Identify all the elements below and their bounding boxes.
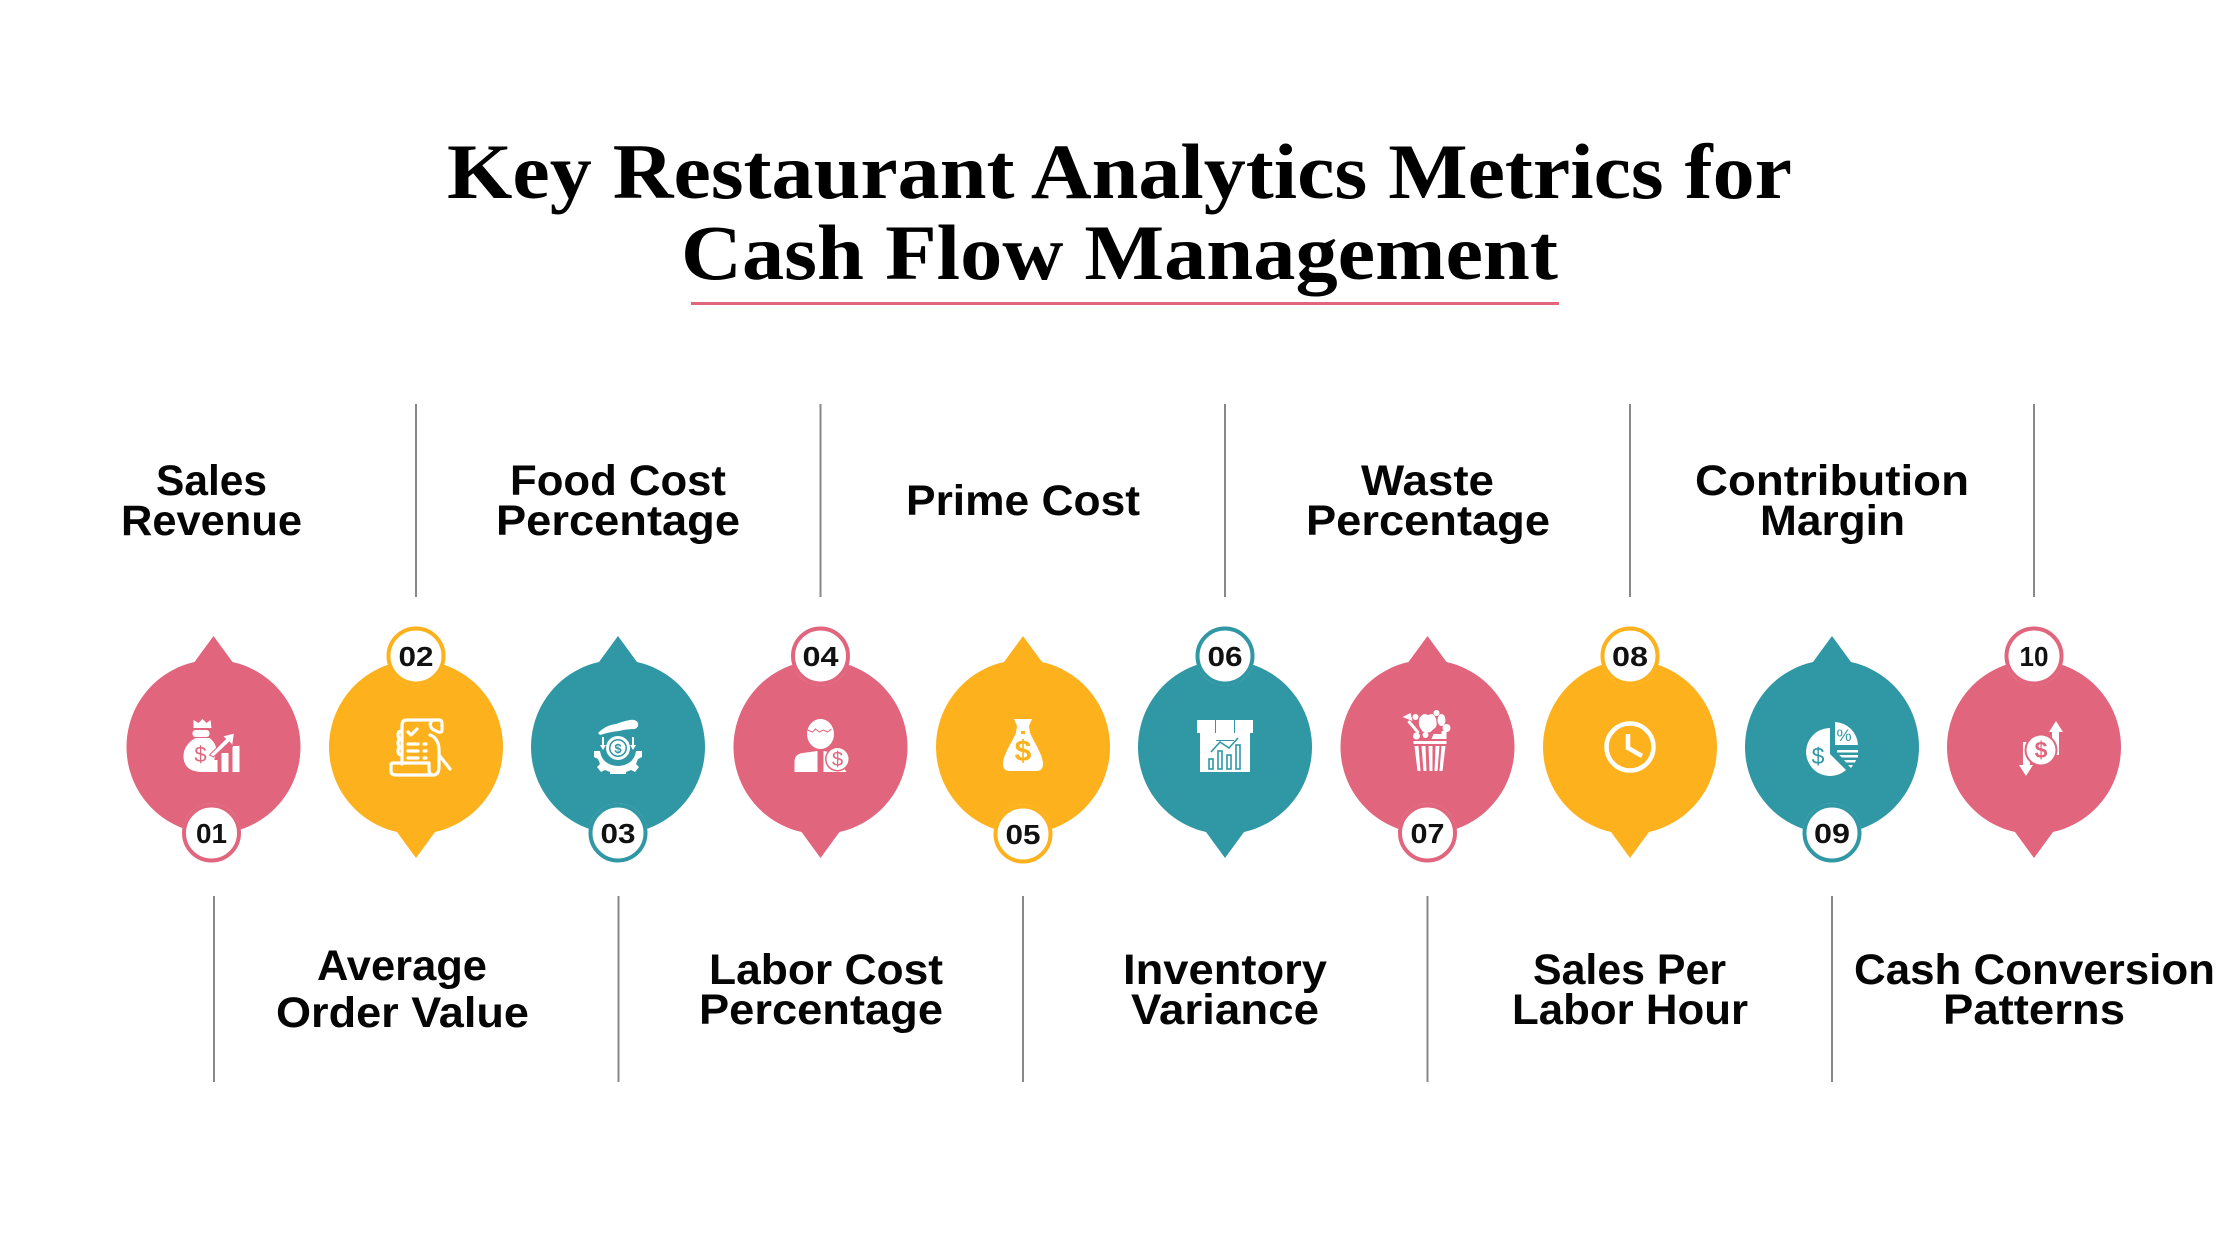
badge 10	[2004, 626, 2064, 686]
title underline	[691, 302, 1559, 305]
badge 02	[386, 626, 446, 686]
icon: dollar coin with up and down arrows	[2019, 721, 2063, 776]
label: Average Order Value	[276, 942, 529, 1037]
metric 08	[1543, 626, 1717, 858]
bubble	[531, 636, 705, 834]
label: Food Cost Percentage: Food Cost	[510, 457, 726, 505]
badge 01	[182, 804, 241, 862]
label: Cash Conversion Patterns: Patterns	[1943, 986, 2125, 1034]
icon: person with dollar coin: $	[832, 749, 843, 771]
icon: pie chart with dollar and percent: $	[1812, 743, 1825, 769]
icon: money bag: $	[1015, 735, 1032, 768]
badge 03	[588, 804, 648, 862]
icon: hand over coin and gear: $	[614, 741, 622, 756]
bubble	[1340, 636, 1514, 834]
icon: money bag	[1003, 719, 1043, 771]
title: Cash Flow Management	[681, 209, 1558, 296]
badge 02: 02	[398, 641, 434, 672]
icon: pie chart with dollar and percent: %	[1836, 726, 1852, 745]
metric 09	[1745, 636, 1919, 862]
metric 05	[936, 636, 1110, 864]
bubble	[1745, 636, 1919, 834]
label: Average Order Value: Order Value	[276, 989, 529, 1037]
badge 09	[1802, 804, 1862, 862]
badge 05	[994, 804, 1052, 864]
icon: waste bin with food scraps	[1402, 710, 1450, 771]
metric 07	[1340, 636, 1514, 862]
icon: clock	[1606, 724, 1654, 770]
badge 08	[1600, 626, 1660, 686]
badge 10: 10	[2020, 641, 2048, 672]
label: Waste Percentage: Waste	[1361, 457, 1494, 505]
label: Labor Cost Percentage: Labor Cost	[709, 946, 943, 994]
metric 02	[329, 626, 503, 858]
badge 03: 03	[600, 818, 636, 849]
badge 07	[1398, 804, 1457, 862]
label: Cash Conversion Patterns	[1854, 946, 2215, 1034]
icon: receipt scroll with checklist	[391, 720, 450, 775]
metric 01	[126, 636, 300, 862]
label: Sales Revenue: Revenue	[121, 497, 302, 545]
bubble	[1138, 660, 1312, 858]
icon: box with chart	[1197, 720, 1253, 772]
badge 04: 04	[802, 641, 839, 672]
label: Contribution Margin: Contribution	[1695, 457, 1969, 505]
label: Food Cost Percentage: Percentage	[496, 497, 740, 545]
label: Inventory Variance: Variance	[1131, 986, 1319, 1034]
metric 10	[1947, 626, 2121, 858]
label: Prime Cost: Prime Cost	[906, 477, 1140, 525]
label: Sales Revenue: Sales	[156, 457, 267, 505]
metric 06	[1138, 626, 1312, 858]
bubble	[734, 660, 908, 858]
icon: hand over coin and gear	[594, 720, 642, 774]
bubble	[126, 636, 300, 834]
label: Waste Percentage	[1306, 457, 1550, 545]
label: Sales Per Labor Hour	[1512, 946, 1748, 1034]
label: Average Order Value: Average	[317, 942, 487, 990]
icon: pie chart with dollar and percent	[1806, 722, 1858, 776]
title	[447, 128, 1792, 296]
badge 09: 09	[1814, 818, 1850, 849]
icon: money bag with rising chart: $	[194, 742, 207, 767]
icon: dollar coin with up and down arrows: $	[2035, 737, 2048, 763]
badge 08: 08	[1612, 641, 1648, 672]
icon: money bag with rising chart	[184, 719, 240, 772]
label: Inventory Variance: Inventory	[1123, 946, 1327, 994]
bubble	[1947, 660, 2121, 858]
label: Labor Cost Percentage	[699, 946, 943, 1034]
label: Food Cost Percentage	[496, 457, 740, 545]
bubble	[1543, 660, 1717, 858]
badge 04	[791, 626, 850, 686]
label: Sales Per Labor Hour: Sales Per	[1533, 946, 1726, 994]
label: Cash Conversion Patterns: Cash Conversion	[1854, 946, 2215, 994]
label: Contribution Margin	[1695, 457, 1969, 545]
label: Labor Cost Percentage: Percentage	[699, 986, 943, 1034]
label: Inventory Variance	[1123, 946, 1327, 1034]
badge 05: 05	[1006, 819, 1040, 850]
label: Sales Per Labor Hour: Labor Hour	[1512, 986, 1748, 1034]
bubble	[936, 636, 1110, 834]
label: Sales Revenue	[121, 457, 302, 545]
icon: person with dollar coin	[794, 719, 850, 772]
badge 06: 06	[1208, 641, 1242, 672]
badge 06	[1196, 626, 1254, 686]
metric 03	[531, 636, 705, 862]
metric 04	[734, 626, 908, 858]
bubble	[329, 660, 503, 858]
label: Waste Percentage: Percentage	[1306, 497, 1550, 545]
badge 07: 07	[1410, 818, 1444, 849]
title: Key Restaurant Analytics Metrics for	[447, 128, 1792, 215]
badge 01: 01	[196, 818, 227, 849]
label: Contribution Margin: Margin	[1760, 497, 1905, 545]
